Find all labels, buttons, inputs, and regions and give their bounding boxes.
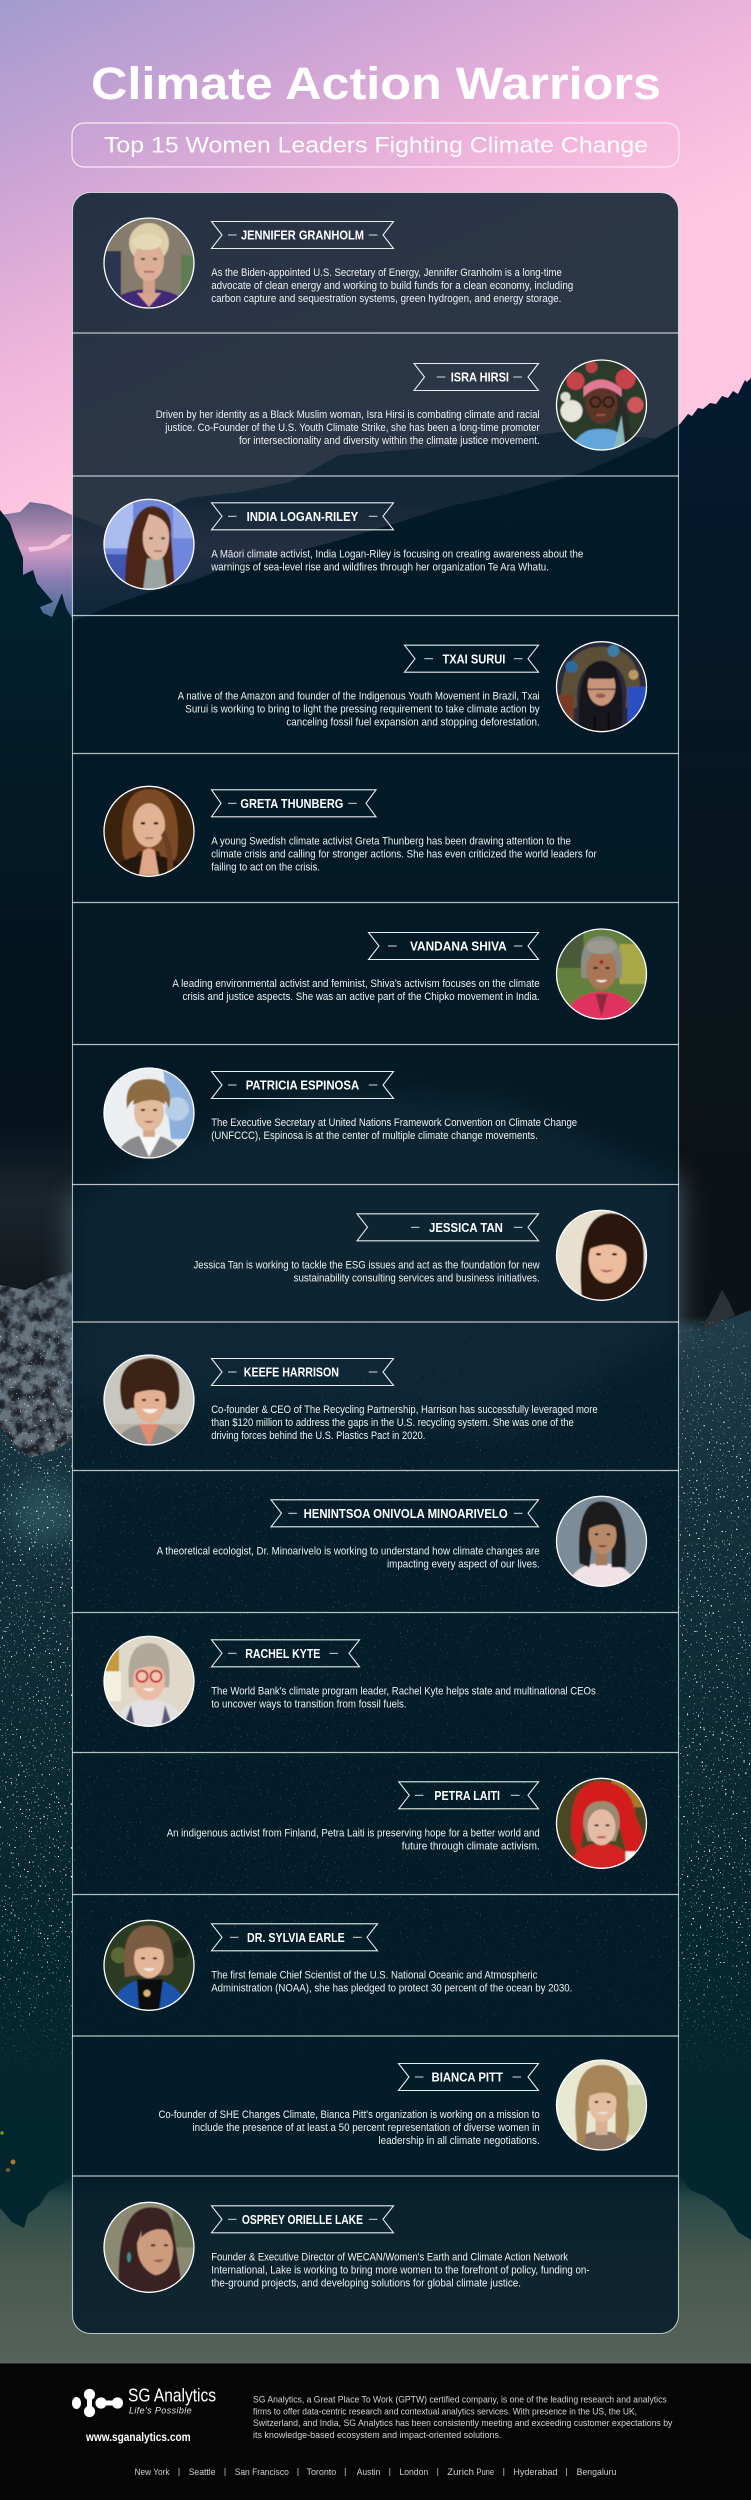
bio text (211, 835, 597, 873)
bio text: Jessica Tan is working to tackle the ESG issues and act as the foundation for new (194, 1259, 540, 1271)
row: Patricia Espinosa (103, 1067, 577, 1159)
bio text: carbon capture and sequestration systems, green hydrogen, and energy storage. (211, 293, 561, 305)
name ribbon (212, 222, 394, 248)
bio text: Founder & Executive Director of WECAN/Women's Earth and Climate Action Network (211, 2251, 569, 2263)
bio text: A theoretical ecologist, Dr. Minoarivelo is working to understand how climate changes are (157, 1545, 540, 1557)
name ribbon (212, 1640, 360, 1667)
office cities: London (399, 2466, 428, 2477)
name ribbon (271, 1500, 538, 1527)
bio text: The World Bank's climate program leader, Rachel Kyte helps state and multinational CEOs (211, 1685, 596, 1697)
portrait: Vandana Shiva (556, 928, 648, 1020)
company description: its knowledge-based ecosystem and impact-oriented solutions. (253, 2430, 501, 2440)
portrait: Osprey Orielle Lake (103, 2201, 195, 2293)
name ribbon: TXAI SURUI (442, 651, 505, 666)
row: Petra Laiti (167, 1777, 647, 1869)
portrait: Patricia Espinosa (103, 1067, 195, 1159)
portrait: Isra Hirsi (556, 359, 648, 451)
main panel (72, 192, 678, 2334)
bio text (156, 409, 540, 447)
bio text: failing to act on the crisis. (211, 861, 320, 873)
bio text: warnings of sea-level rise and wildfires through her organization Te Ara Whatu. (210, 561, 549, 573)
row: Keefe Harrison (103, 1354, 598, 1446)
office cities: Toronto (306, 2466, 336, 2477)
portrait: Keefe Harrison (103, 1354, 195, 1446)
bio text: Co-founder of SHE Changes Climate, Bianca Pitt's organization is working on a mission to (158, 2109, 540, 2121)
bio text (158, 2109, 540, 2147)
office cities: San Francisco (235, 2466, 289, 2477)
bio text: A leading environmental activist and feminist, Shiva's activism focuses on the climate (172, 978, 540, 990)
office cities: Austin (357, 2466, 380, 2477)
footer (0, 2364, 751, 2500)
office cities: New York (135, 2466, 170, 2477)
bio text (157, 1545, 540, 1570)
name ribbon (212, 1072, 394, 1098)
name ribbon: JESSICA TAN (429, 1220, 503, 1235)
bio text: impacting every aspect of our lives. (387, 1558, 540, 1570)
portrait: Txai Surui (556, 641, 648, 733)
bio text: leadership in all climate negotiations. (378, 2135, 540, 2147)
name ribbon (398, 2064, 538, 2090)
bio text: driving forces behind the U.S. Plastics Pact in 2020. (211, 1430, 425, 1442)
name ribbon: INDIA LOGAN-RILEY (247, 509, 359, 524)
name ribbon: GRETA THUNBERG (240, 796, 343, 811)
name ribbon (357, 1214, 538, 1241)
row: Rachel Kyte (103, 1635, 596, 1727)
bio text: crisis and justice aspects. She was an active part of the Chipko movement in India. (182, 991, 540, 1003)
portrait: Jessica Tan (556, 1209, 648, 1301)
row: Vandana Shiva (172, 928, 648, 1020)
website: www.sganalytics.com (85, 2430, 191, 2444)
brand name: SG Analytics (128, 2386, 216, 2406)
name ribbon (399, 1782, 538, 1809)
subtitle box (72, 123, 679, 167)
bio text: sustainability consulting services and business initiatives. (294, 1272, 540, 1284)
bio text: As the Biden-appointed U.S. Secretary of Energy, Jennifer Granholm is a long-time (211, 267, 562, 279)
name ribbon: VANDANA SHIVA (410, 939, 507, 954)
bio text: Surui is working to bring to light the pressing requirement to take climate action by (185, 704, 540, 716)
company description: Switzerland, and India, SG Analytics has been consistently meeting and exceeding customer expectations by (253, 2418, 673, 2428)
name ribbon (414, 364, 538, 390)
name ribbon (212, 790, 376, 817)
office cities (135, 2466, 616, 2477)
logo mark (72, 2389, 123, 2417)
portrait: Dr. Sylvia Earle (103, 1919, 195, 2011)
bio text: International, Lake is working to bring more women to the forefront of policy, funding on- (211, 2264, 590, 2276)
name ribbon (404, 645, 538, 672)
bio text: the-ground projects, and developing solutions for global climate justice. (211, 2277, 521, 2289)
portrait: Henintsoa Onivola Minoarivelo (556, 1495, 648, 1587)
bio text: advocate of clean energy and working to build funds for a clean economy, including (211, 280, 573, 292)
portrait: Rachel Kyte (103, 1635, 195, 1727)
bio text (211, 1685, 596, 1710)
bio text: A native of the Amazon and founder of the Indigenous Youth Movement in Brazil, Txai (178, 691, 540, 703)
row: Jennifer Granholm (103, 217, 573, 309)
bio text: future through climate activism. (402, 1840, 540, 1852)
row: Txai Surui (178, 641, 647, 733)
bio text: Administration (NOAA), she has pledged to protect 30 percent of the ocean by 2030. (211, 1982, 572, 1994)
company description (253, 2395, 673, 2440)
office cities: Bengaluru (577, 2466, 616, 2477)
name ribbon: RACHEL KYTE (245, 1646, 321, 1661)
subtitle box: Top 15 Women Leaders Fighting Climate Change (104, 133, 648, 158)
bio text: A Māori climate activist, India Logan-Riley is focusing on creating awareness about the (211, 548, 583, 560)
bio text: Co-founder & CEO of The Recycling Partnership, Harrison has successfully leveraged more (211, 1404, 598, 1416)
bio text (178, 691, 540, 729)
bio text: justice. Co-Founder of the U.S. Youth Climate Strike, she has been a long-time promoter (164, 422, 540, 434)
bio text (210, 548, 583, 573)
name ribbon: OSPREY ORIELLE LAKE (242, 2212, 363, 2227)
name ribbon: KEEFE HARRISON (244, 1365, 339, 1380)
bio text (194, 1259, 540, 1284)
name ribbon: JENNIFER GRANHOLM (241, 228, 364, 243)
bio text: to uncover ways to transition from fossil fuels. (211, 1698, 407, 1710)
name ribbon: ISRA HIRSI (451, 370, 509, 385)
portrait: Greta Thunberg (103, 785, 195, 877)
bio text (211, 267, 573, 305)
name ribbon (212, 503, 394, 530)
tagline: Life's Possible (129, 2406, 192, 2416)
bio text: canceling fossil fuel expansion and stopping deforestation. (286, 717, 540, 729)
bio text (172, 978, 540, 1003)
name ribbon (368, 932, 538, 960)
row: Henintsoa Onivola Minoarivelo (157, 1495, 648, 1587)
title: Climate Action Warriors (91, 58, 661, 109)
bio text: A young Swedish climate activist Greta Thunberg has been drawing attention to the (211, 835, 571, 847)
portrait: Jennifer Granholm (103, 217, 195, 309)
bio text: (UNFCCC), Espinosa is at the center of multiple climate change movements. (211, 1130, 538, 1142)
portrait: Bianca Pitt (556, 2059, 648, 2151)
name ribbon: BIANCA PITT (432, 2070, 503, 2085)
row: Jessica Tan (194, 1209, 648, 1301)
row: Isra Hirsi (156, 359, 647, 451)
office cities: Pune (476, 2466, 494, 2477)
bio text: The Executive Secretary at United Nations Framework Convention on Climate Change (211, 1117, 577, 1129)
office cities: Seattle (189, 2466, 216, 2477)
bio text (211, 1969, 572, 1994)
name ribbon: HENINTSOA ONIVOLA MINOARIVELO (304, 1506, 508, 1521)
name ribbon: PATRICIA ESPINOSA (246, 1078, 359, 1093)
bio text: climate crisis and calling for stronger actions. She has even criticized the world leaders for (211, 848, 597, 860)
bio text: for intersectionality and diversity within the climate justice movement. (239, 435, 540, 447)
bio text (167, 1827, 540, 1852)
bio text (211, 1404, 598, 1442)
row: Dr. Sylvia Earle (103, 1919, 572, 2011)
office cities: Hyderabad (513, 2466, 558, 2477)
bio text (211, 2251, 590, 2289)
bio text: include the presence of at least a 50 percent representation of diverse women in (192, 2122, 540, 2134)
name ribbon (212, 1924, 378, 1951)
row: Osprey Orielle Lake (103, 2201, 590, 2293)
row: India Logan-Riley (103, 498, 583, 590)
bio text (211, 1117, 577, 1142)
row: Bianca Pitt (158, 2059, 648, 2151)
company description: SG Analytics, a Great Place To Work (GPTW) certified company, is one of the leading research and analytics (253, 2395, 667, 2405)
bio text: Driven by her identity as a Black Muslim woman, Isra Hirsi is combating climate and racial (156, 409, 540, 421)
bio text: An indigenous activist from Finland, Petra Laiti is preserving hope for a better world and (167, 1827, 540, 1839)
office cities: Zurich (447, 2466, 474, 2477)
name ribbon: PETRA LAITI (434, 1788, 500, 1803)
bio text: than $120 million to address the gaps in the U.S. recycling system. She was one of the (211, 1417, 574, 1429)
row: Greta Thunberg (103, 785, 597, 877)
name ribbon: DR. SYLVIA EARLE (247, 1930, 345, 1945)
portrait: India Logan-Riley (103, 498, 195, 590)
company description: firms to offer data-centric research and contextual analytics services. With presence in the US, the UK, (253, 2406, 637, 2416)
name ribbon (212, 1358, 394, 1386)
portrait: Petra Laiti (556, 1777, 648, 1869)
name ribbon (212, 2206, 394, 2233)
bio text: The first female Chief Scientist of the U.S. National Oceanic and Atmospheric (211, 1969, 538, 1981)
